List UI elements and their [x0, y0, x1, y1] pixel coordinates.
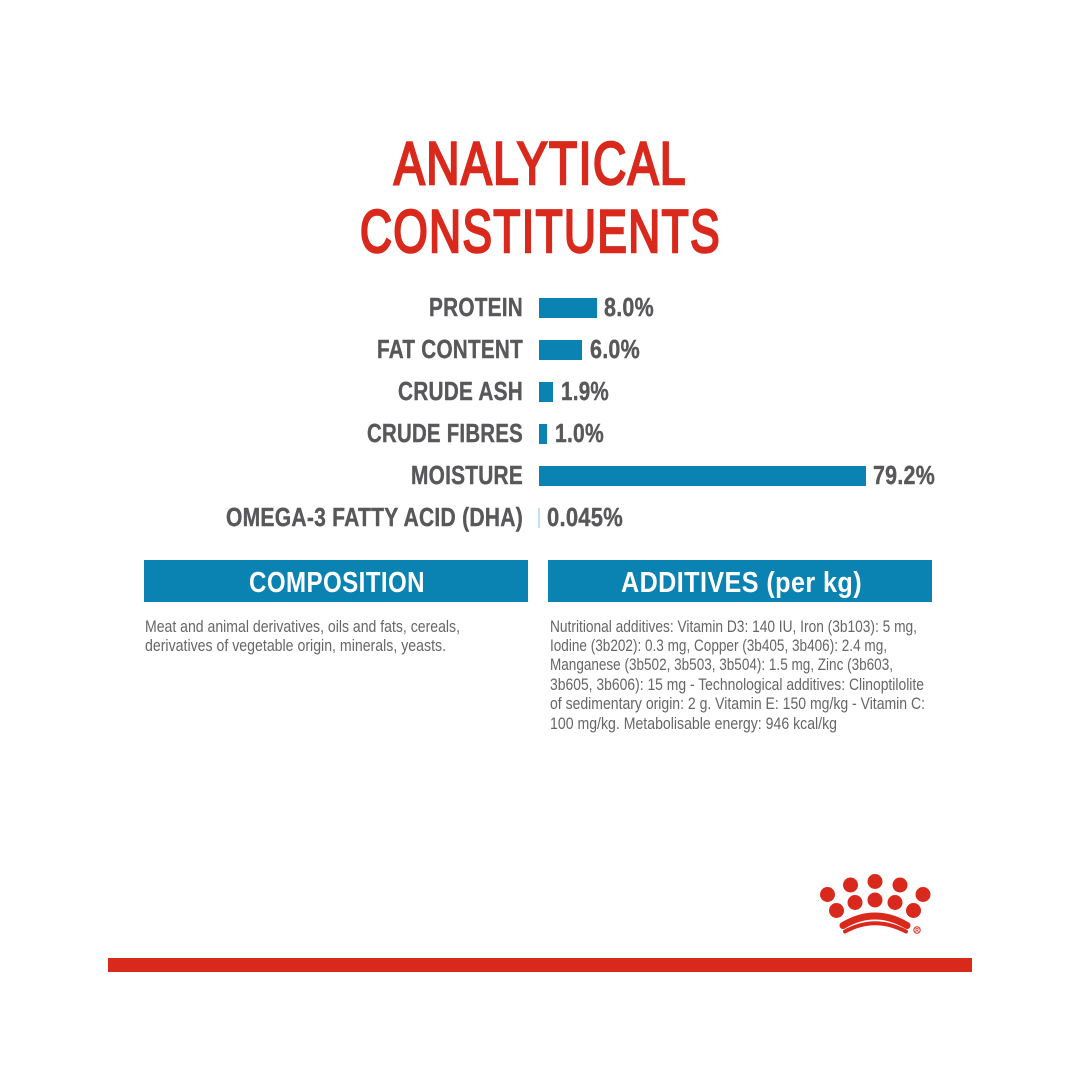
row: protein: PROTEIN [429, 292, 523, 322]
additives text: 100 mg/kg. Metabolisable energy: 946 kcal/kg [550, 714, 837, 733]
additives text: of sedimentary origin: 2 g. Vitamin E: 150 mg/kg - Vitamin C: [550, 694, 925, 713]
row: protein: 8.0% [604, 292, 654, 322]
row: crude ash: CRUDE ASH [398, 376, 523, 406]
composition heading [144, 560, 528, 602]
row: protein [429, 292, 654, 322]
composition text: derivatives of vegetable origin, minerals, yeasts. [145, 636, 446, 655]
row: omega-3: OMEGA-3 FATTY ACID (DHA) [226, 502, 523, 532]
additives text: Nutritional additives: Vitamin D3: 140 IU, Iron (3b103): 5 mg, [550, 617, 917, 636]
icon: royal canin crown logo: R [915, 928, 919, 934]
composition text: Meat and animal derivatives, oils and fats, cereals, [145, 617, 460, 636]
composition text [145, 617, 460, 655]
row: moisture: MOISTURE [411, 460, 523, 490]
additives text: Iodine (3b202): 0.3 mg, Copper (3b405, 3b406): 2.4 mg, [550, 636, 887, 655]
additives heading: ADDITIVES (per kg) [621, 567, 862, 599]
additives text: Manganese (3b502, 3b503, 3b504): 1.5 mg, Zinc (3b603, [550, 655, 893, 674]
additives text: 3b605, 3b606): 15 mg - Technological additives: Clinoptilolite [550, 675, 924, 694]
row: crude fibres: 1.0% [555, 418, 604, 448]
title: CONSTITUENTS [360, 198, 721, 265]
panel: additives [548, 560, 932, 733]
row: crude ash: 1.9% [561, 376, 609, 406]
row: fat content: FAT CONTENT [377, 334, 523, 364]
bar chart: analytical constituents [226, 292, 935, 532]
icon: royal canin crown logo [820, 874, 930, 934]
row: moisture [411, 460, 935, 490]
composition heading: COMPOSITION [249, 567, 425, 599]
additives heading [548, 560, 932, 602]
panel: composition [144, 560, 528, 655]
row: crude fibres: CRUDE FIBRES [367, 418, 523, 448]
row: omega-3: 0.045% [547, 502, 623, 532]
row: fat content: 6.0% [590, 334, 640, 364]
additives text [550, 617, 925, 733]
row: fat content [377, 334, 640, 364]
footer red bar [108, 958, 972, 972]
title: ANALYTICAL [394, 130, 687, 197]
row: moisture: 79.2% [873, 460, 935, 490]
title [360, 130, 721, 265]
